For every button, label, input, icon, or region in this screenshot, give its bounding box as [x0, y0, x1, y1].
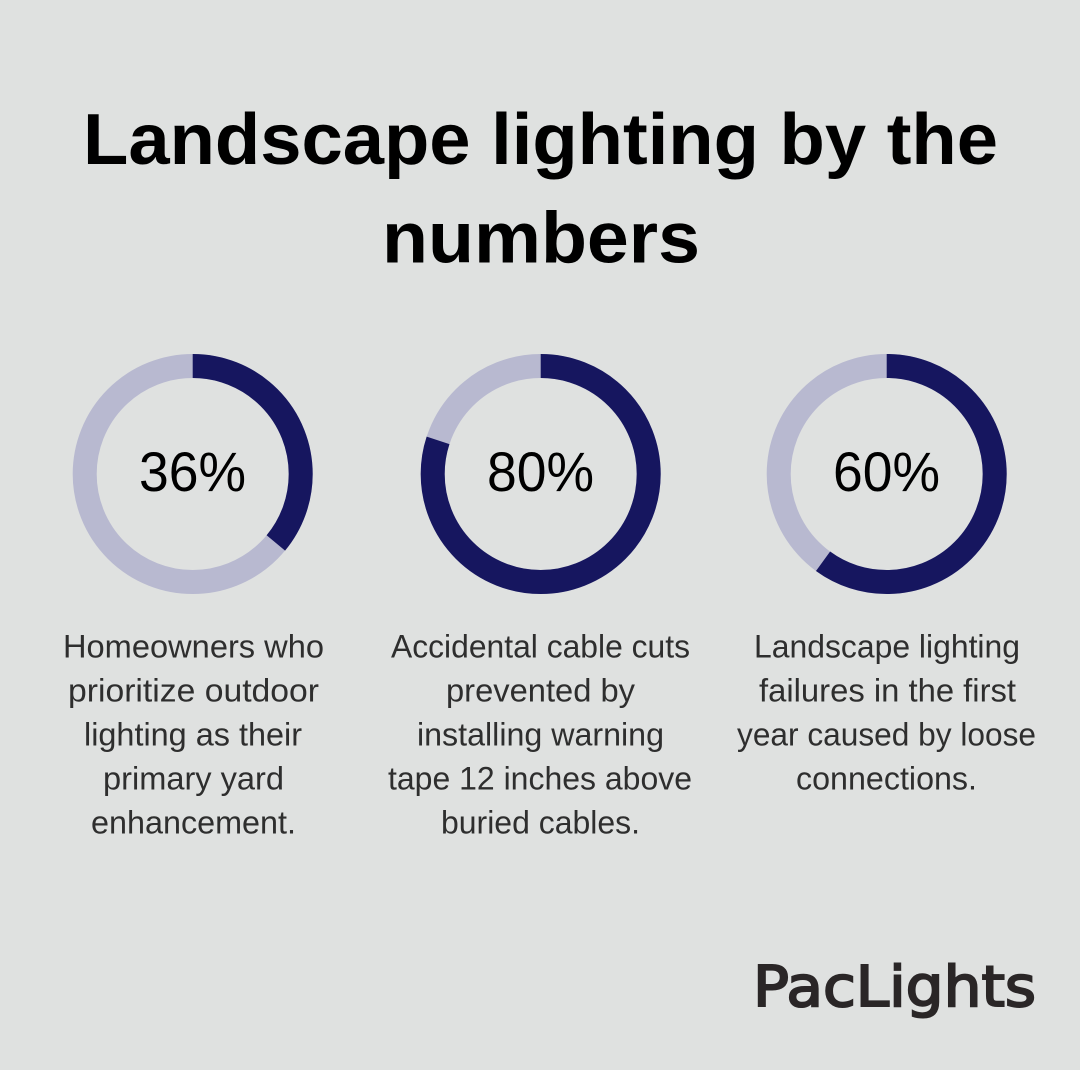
- value: 60%: 60%: [833, 440, 940, 503]
- description: lighting failures: failures in the first: [759, 672, 1016, 708]
- panel: 60% lighting failures: [737, 366, 1036, 796]
- title: numbers: [382, 198, 700, 278]
- description: homeowners: enhancement.: [91, 804, 296, 840]
- description: homeowners: Homeowners who: [63, 628, 324, 664]
- value: 80%: 80%: [487, 440, 594, 503]
- description: cable cuts: buried cables.: [441, 804, 640, 840]
- value: 36%: 36%: [139, 440, 246, 503]
- description: lighting failures: [737, 628, 1036, 796]
- donut chart: 80%: [433, 366, 649, 582]
- description: cable cuts: tape 12 inches above: [388, 760, 692, 796]
- description: homeowners: [63, 628, 324, 840]
- description: lighting failures: connections.: [796, 760, 977, 796]
- description: homeowners: lighting as their: [84, 716, 302, 752]
- description: homeowners: primary yard: [103, 760, 284, 796]
- description: lighting failures: year caused by loose: [737, 716, 1036, 752]
- description: cable cuts: [388, 628, 692, 840]
- description: homeowners: prioritize outdoor: [68, 672, 319, 708]
- donut chart: 60%: [779, 366, 995, 582]
- description: cable cuts: prevented by: [446, 672, 635, 708]
- panel: 36% homeowners: [63, 366, 324, 840]
- logo: PacLights: PacLights: [753, 955, 1036, 1020]
- panel: 80% cable cuts: [388, 366, 692, 840]
- title: Landscape lighting by the: [83, 99, 998, 180]
- title: [83, 99, 998, 278]
- description: cable cuts: Accidental cable cuts: [391, 628, 690, 664]
- description: lighting failures: Landscape lighting: [754, 628, 1020, 664]
- description: cable cuts: installing warning: [417, 716, 664, 752]
- donut chart: 36%: [85, 366, 301, 582]
